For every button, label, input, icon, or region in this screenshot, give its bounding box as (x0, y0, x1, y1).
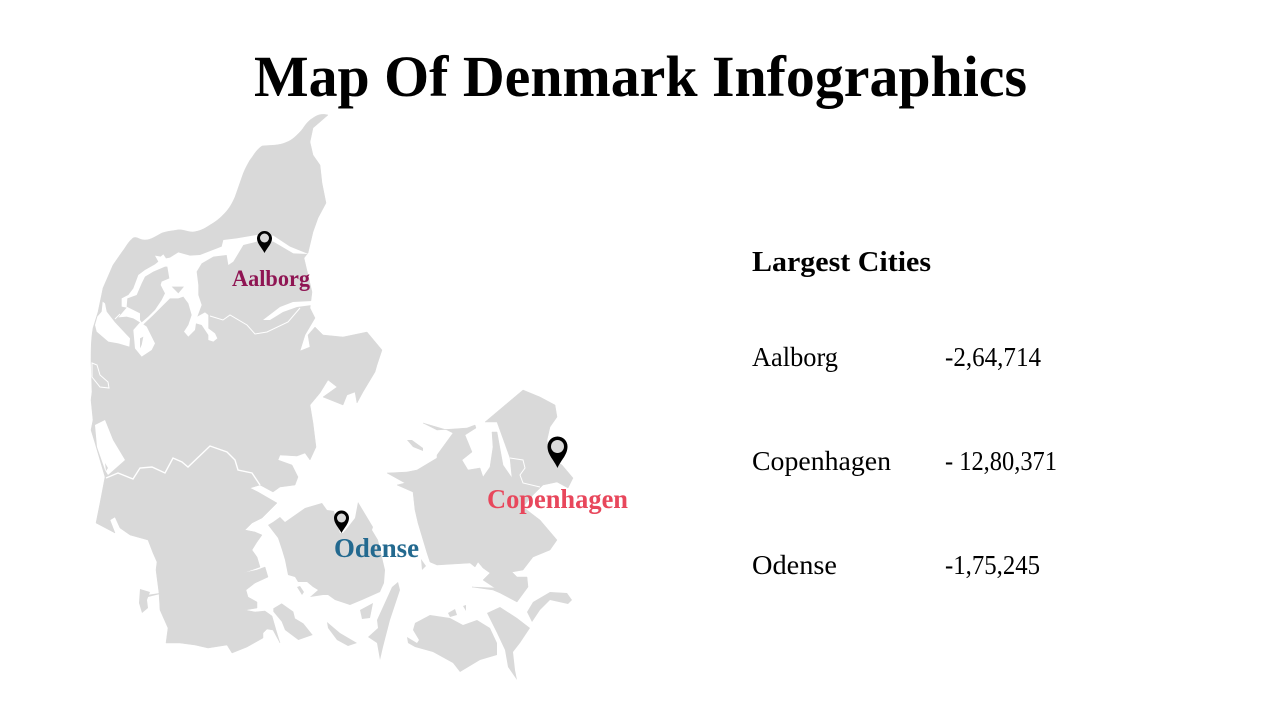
island: Zealand (387, 390, 573, 602)
region: Jutland (91, 114, 382, 653)
island: Aeroe (327, 622, 357, 646)
region borders (210, 308, 300, 334)
island: Samsoe (407, 440, 423, 451)
label: Aalborg: Aalborg (232, 266, 310, 291)
pin: Aalborg (257, 231, 272, 253)
row: Odense (752, 550, 1040, 580)
island: Als (273, 603, 313, 640)
Nissum lagoon outline (92, 363, 109, 388)
map of Denmark (91, 114, 573, 680)
small islets (421, 559, 466, 617)
island: Roemoe (139, 589, 160, 613)
island: Moen (527, 592, 572, 622)
Mariager fjord (263, 301, 312, 320)
row: Copenhagen (752, 446, 1057, 476)
island: Falster (487, 607, 530, 680)
island: Funen (268, 502, 385, 605)
island: Langeland (368, 582, 400, 660)
Limfjord (95, 235, 308, 357)
row: Odense: -1,75,245 (945, 550, 1040, 580)
row: Aalborg: Aalborg (752, 342, 838, 372)
island: Mors (127, 267, 169, 322)
label: Copenhagen: Copenhagen (487, 484, 628, 514)
row: Copenhagen: Copenhagen (752, 446, 892, 476)
row: Aalborg: -2,64,714 (945, 342, 1041, 372)
row: Odense: Odense (752, 550, 837, 580)
Ringkoebing lagoon (95, 420, 125, 475)
island: Lolland (407, 615, 497, 672)
pin: Odense (334, 511, 349, 533)
heading: Largest Cities: Largest Cities (752, 247, 931, 278)
pin: Copenhagen (548, 436, 568, 468)
row: Copenhagen: - 12,80,371 (945, 446, 1057, 476)
row: Aalborg (752, 342, 1041, 372)
label: Odense: Odense (334, 533, 419, 563)
title: Map Of Denmark Infographics (254, 44, 1027, 109)
Nissum bay (95, 302, 130, 347)
island: Taasinge (360, 603, 373, 619)
